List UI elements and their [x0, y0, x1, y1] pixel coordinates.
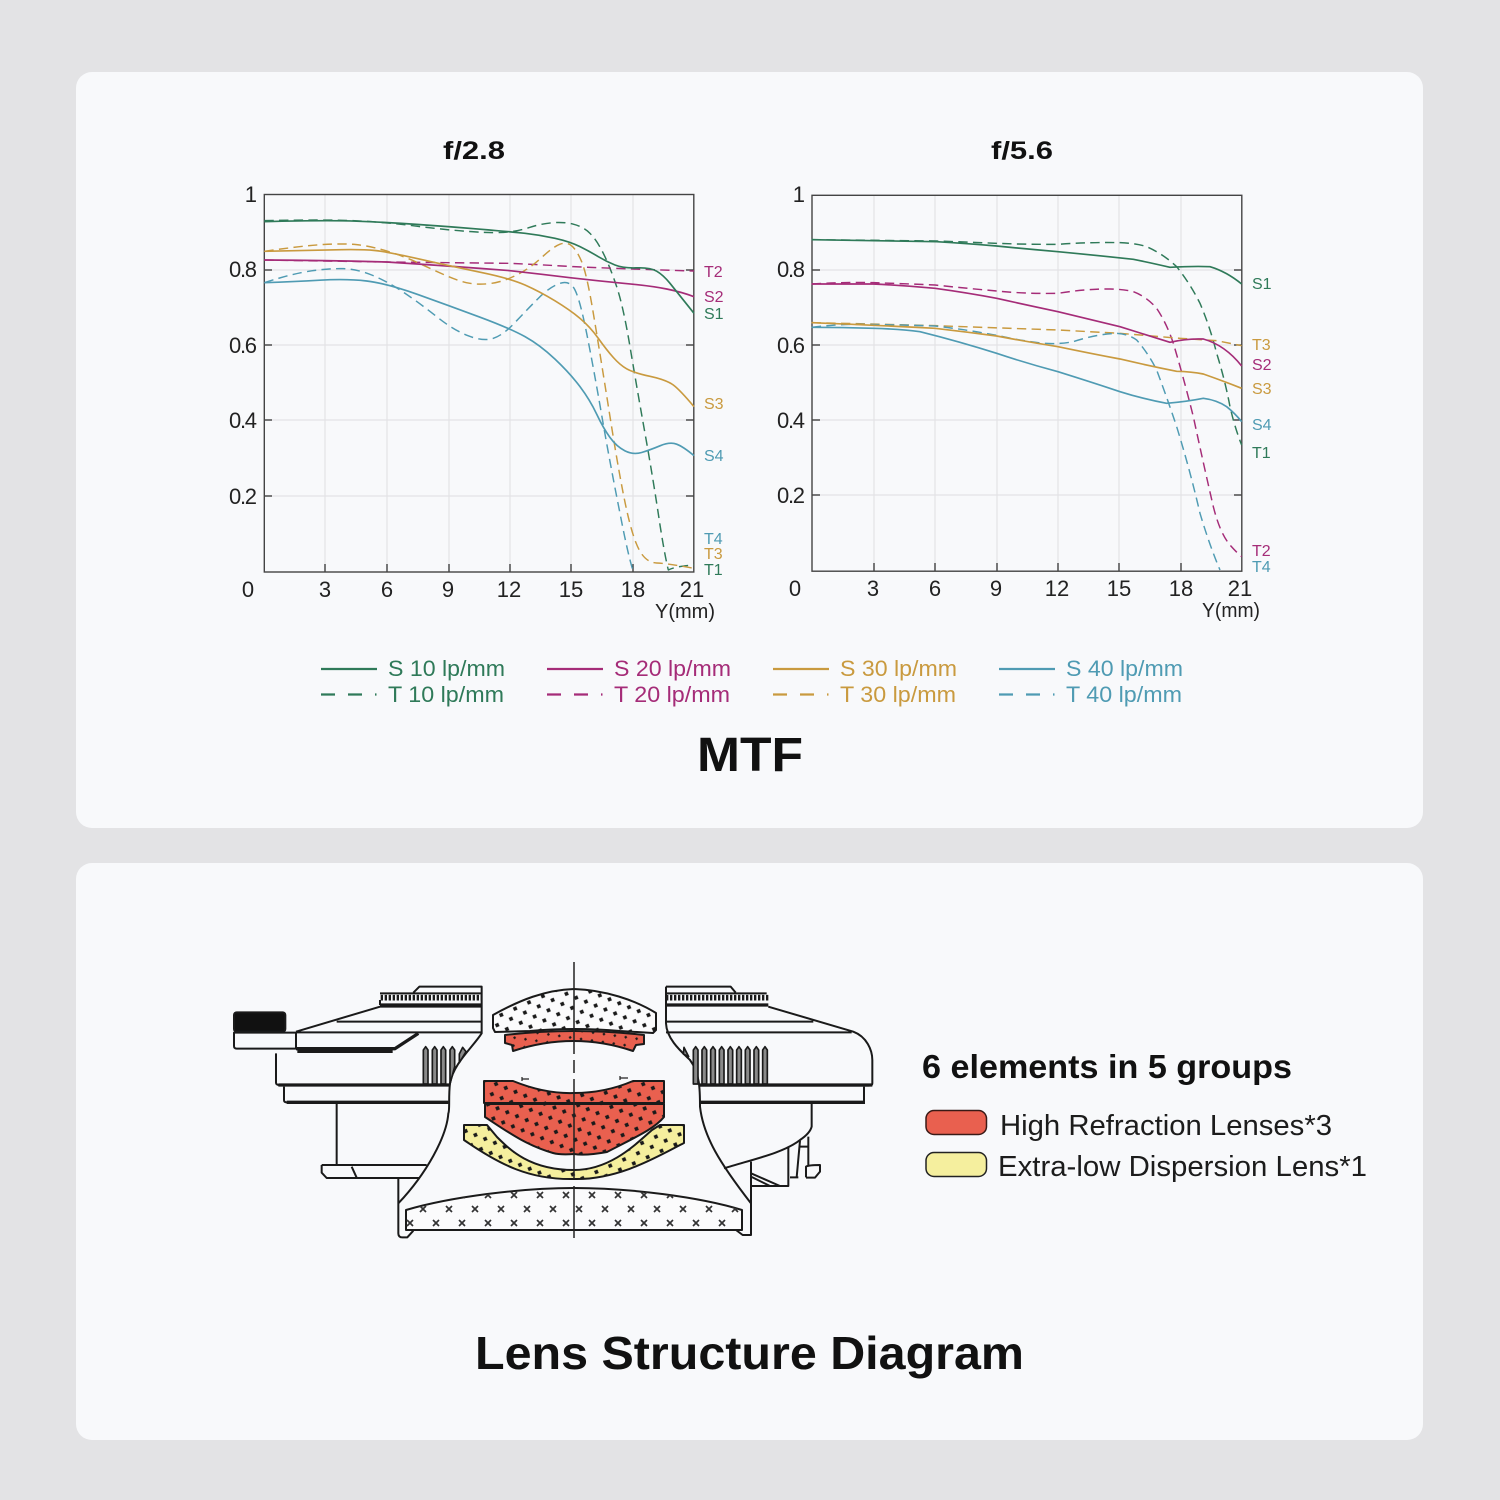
chart: MTF at f/2.8: T1 — [704, 562, 723, 579]
title: MTF: MTF — [697, 729, 803, 782]
title: Lens Structure Diagram: Lens Structure Diagram — [475, 1327, 1024, 1379]
chart: MTF at f/2.8: 9 — [442, 577, 454, 602]
lens 6: white rear element — [406, 1188, 742, 1230]
chart: MTF at f/2.8: 15 — [559, 577, 583, 602]
chart: MTF at f/2.8: S2 — [704, 289, 724, 306]
chart: MTF at f/2.8: 0.6 — [229, 333, 257, 358]
chart: MTF at f/5.6: S3 — [1252, 381, 1272, 398]
chart: MTF at f/2.8 — [229, 182, 724, 623]
panel: MTF charts — [76, 72, 1423, 828]
chart: MTF at f/5.6: 9 — [990, 576, 1002, 601]
chart: MTF at f/5.6: S1 — [1252, 276, 1272, 293]
chart: MTF at f/2.8: T4 — [704, 531, 723, 548]
chart: MTF at f/5.6: T1 — [1252, 445, 1271, 462]
chart: MTF at f/5.6: 18 — [1169, 576, 1193, 601]
chart: MTF at f/2.8: 0.8 — [229, 257, 257, 282]
chart: MTF at f/5.6: 3 — [867, 576, 879, 601]
chart: MTF at f/5.6: 21 — [1228, 576, 1252, 601]
lens 3: red cemented doublet, upper — [484, 1081, 664, 1103]
chart: MTF at f/5.6: 6 — [929, 576, 941, 601]
chart: MTF at f/5.6: 1 — [793, 182, 805, 207]
chart: MTF at f/5.6: 12 — [1045, 576, 1069, 601]
legend: lens types — [922, 1048, 1367, 1183]
legend heading: 6 elements in 5 groups — [922, 1048, 1292, 1085]
legend: MTF line styles: S 40 lp/mm — [1066, 656, 1183, 681]
legend: MTF line styles: T 10 lp/mm — [388, 682, 504, 707]
chart: MTF at f/5.6: S2 — [1252, 357, 1272, 374]
chart: MTF at f/5.6: 0.2 — [777, 483, 805, 508]
chart: MTF at f/5.6: 0.8 — [777, 257, 805, 282]
chart: MTF at f/2.8: 0 — [242, 577, 254, 602]
chart: MTF at f/5.6: T2 — [1252, 543, 1271, 560]
chart: MTF at f/2.8: S3 — [704, 396, 724, 413]
chart: MTF at f/2.8: Y(mm) — [655, 601, 715, 623]
lens 4: red cemented doublet, lower — [485, 1104, 664, 1155]
lens housing: right half — [666, 987, 872, 1235]
legend: MTF line styles: S 30 lp/mm — [840, 656, 957, 681]
chart: MTF at f/2.8: 1 — [245, 182, 257, 207]
heading: f/5.6: f/5.6 — [991, 137, 1053, 165]
chart: MTF at f/2.8: 0.4 — [229, 408, 257, 433]
chart: MTF at f/5.6: 15 — [1107, 576, 1131, 601]
chart: MTF at f/5.6: 0.4 — [777, 408, 805, 433]
chart: MTF at f/2.8: 6 — [381, 577, 393, 602]
chart: MTF at f/2.8: 21 — [680, 577, 704, 602]
label: high refraction: High Refraction Lenses*3 — [1000, 1110, 1332, 1142]
lens 1: white front element — [493, 989, 656, 1033]
legend: MTF line styles: T 40 lp/mm — [1066, 682, 1182, 707]
chart: MTF at f/5.6 — [777, 182, 1272, 622]
chart: MTF at f/5.6: T3 — [1252, 337, 1271, 354]
lens 2: red high refraction element — [505, 1031, 644, 1051]
swatch: extra-low dispersion — [926, 1152, 986, 1176]
optical axis line — [573, 962, 575, 1238]
lens 5: yellow extra-low dispersion element — [464, 1125, 684, 1179]
chart: MTF at f/5.6: 0.6 — [777, 333, 805, 358]
legend: MTF line styles: T 20 lp/mm — [614, 682, 730, 707]
heading: f/2.8: f/2.8 — [443, 137, 505, 165]
panel: lens structure — [76, 863, 1423, 1440]
chart: MTF at f/2.8: S1 — [704, 306, 724, 323]
swatch: high refraction — [926, 1110, 986, 1134]
chart: MTF at f/5.6: S4 — [1252, 417, 1272, 434]
chart: MTF at f/5.6: Y(mm) — [1202, 600, 1260, 622]
chart: MTF at f/2.8: 0.2 — [229, 484, 257, 509]
legend: MTF line styles — [321, 656, 1183, 707]
legend: MTF line styles: S 20 lp/mm — [614, 656, 731, 681]
chart: MTF at f/5.6: 0 — [789, 576, 801, 601]
chart: MTF at f/2.8: T2 — [704, 264, 723, 281]
legend: MTF line styles: T 30 lp/mm — [840, 682, 956, 707]
chart: MTF at f/5.6: T4 — [1252, 559, 1271, 576]
small spacer marks — [522, 1076, 628, 1081]
label: extra-low dispersion: Extra-low Dispersion Lens*1 — [998, 1151, 1367, 1183]
legend: MTF line styles: S 10 lp/mm — [388, 656, 505, 681]
diagram: lens cross-section — [234, 962, 872, 1238]
chart: MTF at f/2.8: 12 — [497, 577, 521, 602]
chart: MTF at f/2.8: S4 — [704, 448, 724, 465]
chart: MTF at f/2.8: T3 — [704, 546, 723, 563]
chart: MTF at f/2.8: 18 — [621, 577, 645, 602]
lens housing: left half — [234, 987, 482, 1237]
chart: MTF at f/2.8: 3 — [319, 577, 331, 602]
